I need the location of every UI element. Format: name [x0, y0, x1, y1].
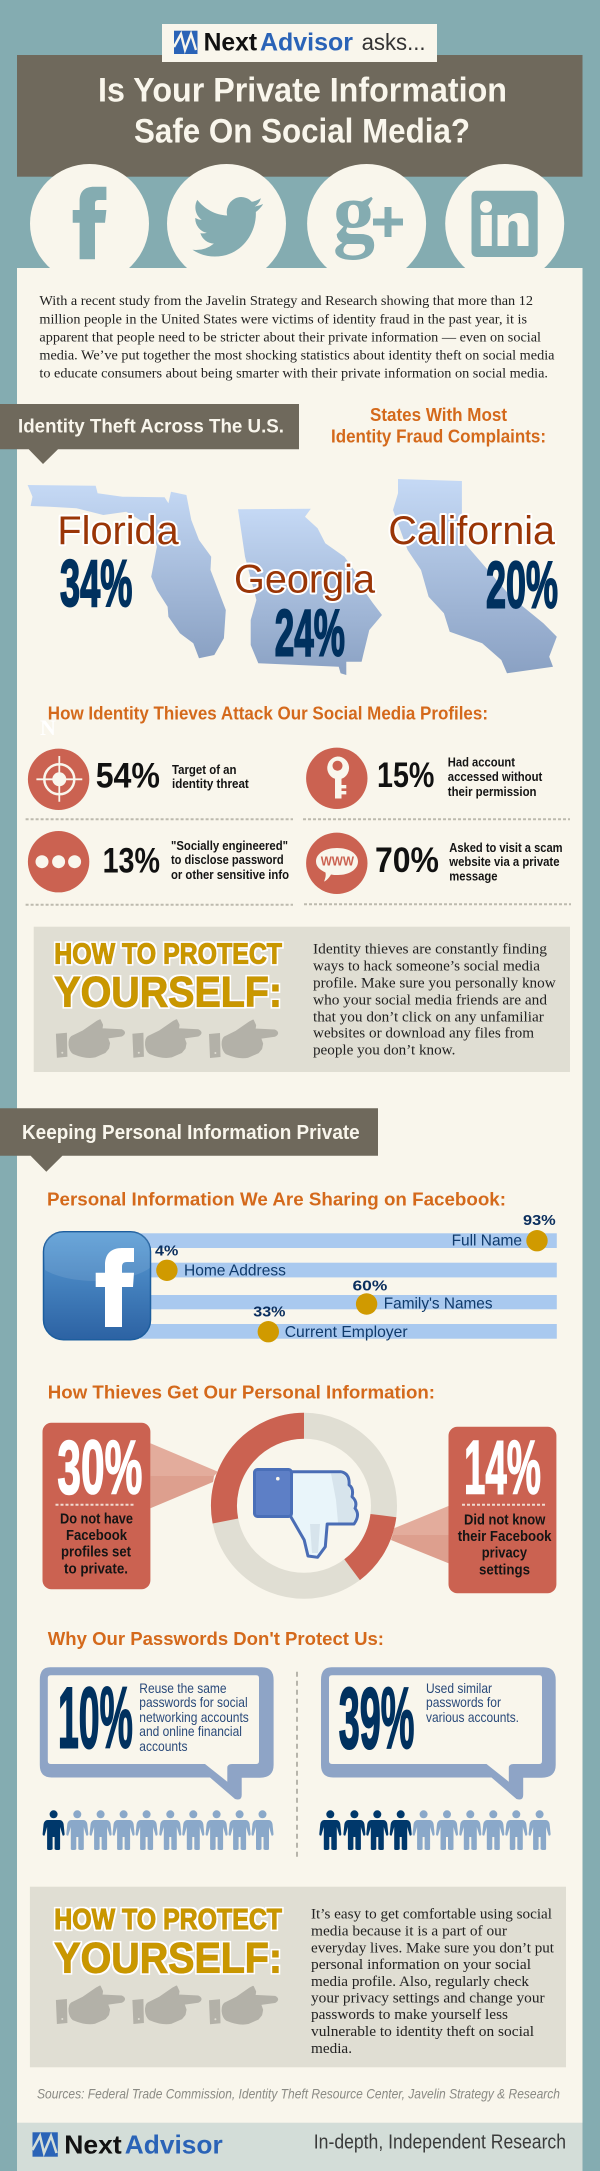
data: full name 93%: Full Name: [452, 1232, 522, 1249]
logo wordmark: Next: [64, 2129, 122, 2159]
advice text: that you don’t click on any unfamiliar: [313, 1009, 544, 1025]
speech bubble: 39%: [321, 1667, 556, 1800]
label: georgia: Georgia: [234, 557, 376, 601]
section tab: keeping information private: [0, 1108, 378, 1172]
description: accounts: [139, 1738, 188, 1754]
description: their Facebook: [458, 1528, 552, 1545]
description: [448, 756, 543, 799]
heading: how to protect: HOW TO PROTECT: [54, 938, 282, 970]
speech bubble: 10%: [40, 1667, 274, 1800]
description: [448, 841, 563, 884]
heading: how to protect: HOW TO PROTECT: [54, 1904, 282, 1936]
heading: states with most complaints: Identity Fraud Complaints:: [331, 427, 546, 447]
data: family's names 60%: 60%: [352, 1277, 387, 1294]
description: networking accounts: [139, 1709, 249, 1725]
title text: Is Your Private Information: [98, 72, 507, 110]
intro paragraph: With a recent study from the Javelin Strategy and Research showing that more than 12: [39, 294, 533, 309]
heading: yourself: YOURSELF:: [54, 1934, 282, 1982]
divider row 2: [26, 903, 571, 906]
number: 30%: [57, 1425, 142, 1510]
description: Target of an: [172, 763, 236, 777]
icon: key: [306, 748, 367, 809]
description: accessed without: [448, 770, 543, 784]
data: current employer 33%: 33%: [253, 1304, 286, 1321]
data: current employer 33%: [253, 1304, 408, 1342]
advice text: websites or download any files from: [313, 1025, 534, 1041]
title text: Safe On Social Media?: [134, 113, 470, 151]
advice text: It’s easy to get comfortable using social: [311, 1906, 552, 1922]
description: to disclose password: [171, 853, 284, 867]
advice text: [313, 941, 556, 1058]
advice text: your privacy settings and change your: [311, 1990, 545, 2006]
top logo: [162, 24, 437, 62]
section tab: identity theft: Identity Theft Across The U.S.: [18, 417, 284, 438]
number: 15%: [377, 756, 434, 795]
intro paragraph: million people in the United States were victims of identity fraud in the past year, it is: [39, 312, 527, 327]
icon: google plus: [307, 164, 426, 283]
heading: how identity thieves attack: [40, 703, 488, 740]
advice text: vulnerable to identity theft on social: [311, 2024, 534, 2040]
icon: facebook: [30, 164, 149, 283]
description: various accounts.: [426, 1709, 519, 1725]
icon: linkedin: [445, 164, 564, 283]
callout: 14%: [391, 1425, 556, 1593]
advice text: [311, 1906, 555, 2057]
description: passwords for social: [139, 1694, 248, 1710]
description: Had account: [448, 756, 516, 770]
advice text: people you don’t know.: [313, 1042, 455, 1058]
icon: twitter: [167, 164, 286, 283]
number: 54%: [96, 757, 160, 796]
footer band: [17, 2123, 582, 2171]
description: privacy: [482, 1545, 528, 1562]
section tab: identity theft: [0, 404, 299, 464]
data: full name 93%: 93%: [523, 1212, 556, 1229]
number: 13%: [103, 841, 160, 880]
advice text: profile. Make sure you personally know: [313, 975, 556, 991]
description: [458, 1511, 552, 1579]
advice text: Identity thieves are constantly finding: [313, 941, 547, 957]
donut chart: thumbs down: [150, 1426, 449, 1586]
speech bubble: 10%: 10%: [58, 1670, 133, 1766]
map: georgia: [234, 509, 382, 675]
pictogram: 1 of 10 people: [43, 1810, 273, 1850]
icon: facebook logo: [44, 1232, 150, 1340]
heading: personal information on facebook: Personal Information We Are Sharing on Facebook:: [47, 1190, 506, 1210]
stat: 15% account accessed: [306, 748, 543, 809]
heading: why passwords don't protect: Why Our Passwords Don't Protect Us:: [48, 1629, 384, 1649]
data: home address 4%: Home Address: [184, 1263, 286, 1280]
pictogram: 4 of 10 people: [319, 1810, 551, 1850]
data: home address 4%: 4%: [155, 1243, 178, 1260]
heading: how identity thieves attack: How Identity Thieves Attack Our Social Media Profiles:: [48, 703, 488, 723]
number: 70%: [375, 841, 439, 880]
title band: [17, 55, 582, 177]
number: georgia: 24%: [275, 596, 345, 670]
logo wordmark: Next: [204, 29, 258, 57]
label: florida: Florida: [57, 509, 179, 553]
bar chart: facebook sharing: [44, 1212, 557, 1342]
advice text: ways to hack someone’s social media: [313, 958, 540, 974]
icon: pointing hands: [56, 1986, 277, 2024]
description: Did not know: [464, 1511, 546, 1528]
icon: www bubble: [306, 833, 367, 894]
title text: [98, 72, 507, 151]
description: settings: [479, 1562, 530, 1579]
asks: asks...: [362, 29, 426, 55]
advice text: media.: [311, 2041, 352, 2057]
description: profiles set: [61, 1544, 131, 1561]
heading: yourself: YOURSELF:: [54, 969, 282, 1017]
description: [171, 839, 289, 882]
description: passwords for: [426, 1694, 501, 1710]
description: website via a private: [448, 855, 560, 869]
panel: how to protect yourself 2: [30, 1887, 566, 2067]
advice text: media because it is a part of our: [311, 1923, 507, 1939]
heading: how identity thieves attack: N: [40, 715, 56, 740]
description: "Socially engineered": [171, 839, 288, 853]
advice text: everyday lives. Make sure you don’t put: [311, 1940, 555, 1956]
description: Asked to visit a scam: [449, 841, 563, 855]
panel: how to protect yourself 1: [34, 927, 570, 1072]
icon: pointing hands: [56, 1020, 277, 1058]
description: their permission: [448, 785, 536, 799]
intro paragraph: apparent that people need to be stricter about their private information — even on social: [39, 330, 541, 345]
icon: google plus: g: [333, 164, 375, 260]
icon: thumbs down: [254, 1470, 358, 1557]
stat: 54% target: [28, 749, 250, 810]
logo wordmark blue: Advisor: [260, 29, 353, 57]
data: family's names 60%: [352, 1277, 492, 1315]
icon: NextAdvisor mark: [174, 31, 198, 54]
arrow: wedge to donut: [150, 1443, 218, 1508]
intro paragraph: to educate consumers about being smarter with their private information on social media.: [39, 366, 548, 381]
arrow: wedge to donut: [391, 1506, 448, 1563]
advice text: personal information on your social: [311, 1957, 531, 1973]
description: Used similar: [426, 1680, 492, 1696]
description: or other sensitive info: [171, 868, 289, 882]
icon: www bubble: WWW: [321, 854, 355, 868]
intro paragraph: media. We’ve put together the most shocking statistics about identity theft on social media: [39, 348, 555, 363]
heading: how thieves get information: How Thieves Get Our Personal Information:: [48, 1382, 435, 1402]
description: Facebook: [66, 1527, 128, 1544]
stat: 13% socially engineered: [28, 831, 289, 892]
advice text: who your social media friends are and: [313, 992, 548, 1008]
icon: target: [28, 749, 89, 810]
description: identity threat: [172, 777, 250, 791]
description: and online financial: [139, 1723, 242, 1739]
description: [426, 1680, 519, 1725]
advice text: media profile. Also, regularly check: [311, 1974, 529, 1990]
icon: three dots: [28, 831, 89, 892]
number: florida: 34%: [60, 546, 132, 620]
heading: states with most complaints: [331, 405, 546, 447]
stat: 70% scam website: [306, 833, 563, 894]
divider row 1: [26, 818, 570, 820]
social media icons: [30, 164, 564, 283]
description: [139, 1680, 249, 1754]
map: california: [388, 479, 558, 673]
description: Do not have: [60, 1510, 133, 1527]
advice text: passwords to make yourself less: [311, 2007, 508, 2023]
map: florida: [28, 485, 226, 658]
description: [60, 1510, 133, 1578]
callout: 30%: [42, 1423, 218, 1589]
section tab: keeping information private: Keeping Personal Information Private: [22, 1122, 360, 1144]
description: message: [449, 870, 498, 884]
vertical divider: [296, 1672, 298, 1858]
intro paragraph: [39, 294, 555, 381]
heading: states with most complaints: States With Most: [370, 405, 507, 425]
speech bubble: 39%: 39%: [339, 1671, 414, 1767]
logo wordmark blue: Advisor: [125, 2129, 223, 2159]
data: full name 93%: [452, 1212, 556, 1251]
description: Reuse the same: [139, 1680, 227, 1696]
icon: NextAdvisor mark: [32, 2132, 58, 2157]
tagline: In-depth, Independent Research: [314, 2132, 566, 2154]
description: to private.: [64, 1561, 128, 1578]
data: current employer 33%: Current Employer: [285, 1324, 408, 1341]
description: [172, 763, 250, 791]
data: family's names 60%: Family's Names: [384, 1295, 492, 1312]
label: california: California: [388, 509, 556, 553]
data: home address 4%: [155, 1243, 286, 1281]
